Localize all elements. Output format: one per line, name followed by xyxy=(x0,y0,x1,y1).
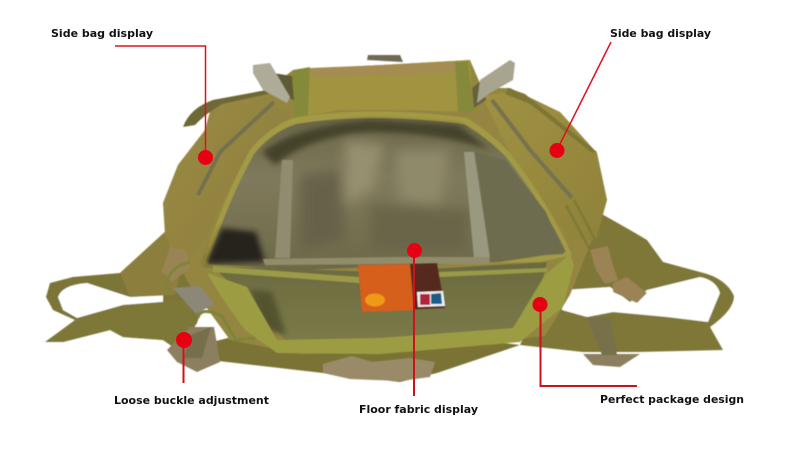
marker dot xyxy=(407,243,422,258)
left pouch shading xyxy=(163,95,293,265)
inner mesh pocket xyxy=(263,152,564,265)
callout: floor fabric display xyxy=(359,243,478,416)
main outer body and side pouches xyxy=(163,60,607,354)
right strap opening xyxy=(562,277,720,322)
label: Perfect package design xyxy=(600,393,744,406)
credit card xyxy=(358,263,445,312)
right pouch flap xyxy=(505,88,597,153)
bottom strap and centre buckle xyxy=(167,327,520,382)
product photo: tactical waist bag xyxy=(45,55,734,382)
label: Loose buckle adjustment xyxy=(114,394,269,407)
centre buckle xyxy=(323,356,435,381)
right side buckle xyxy=(472,60,515,108)
top panel xyxy=(293,55,474,118)
leader line xyxy=(115,46,206,157)
right cords xyxy=(566,200,598,250)
dark left corner xyxy=(205,228,265,264)
lining folds xyxy=(300,140,470,250)
marker dot xyxy=(532,297,548,312)
shadow under the top rim xyxy=(262,120,490,165)
callout: perfect package design xyxy=(532,297,744,406)
front pocket rim xyxy=(213,266,547,283)
right pouch shading xyxy=(482,92,607,240)
leader line xyxy=(413,250,415,396)
left side buckle xyxy=(253,63,294,103)
callout: side bag display (left) xyxy=(51,27,213,165)
strap buckle right xyxy=(583,354,640,367)
left strap buckle xyxy=(167,327,220,372)
label: Side bag display xyxy=(51,27,153,40)
callout: loose buckle adjustment xyxy=(114,332,269,407)
left drawstring toggle xyxy=(162,247,190,282)
front pocket lip xyxy=(207,254,574,354)
front pocket interior xyxy=(212,262,547,340)
callout: side bag display (right) xyxy=(550,27,711,158)
marker dot xyxy=(550,143,564,158)
leader line xyxy=(557,42,611,150)
leader line xyxy=(182,340,184,383)
interior opening rim xyxy=(203,112,572,268)
marker dot xyxy=(176,332,192,348)
interior lining xyxy=(208,118,566,270)
right zipper xyxy=(492,100,572,198)
left pouch flap xyxy=(183,90,268,127)
top buckle xyxy=(367,55,403,62)
left strap opening xyxy=(58,283,163,318)
label: Floor fabric display xyxy=(359,403,478,416)
marker dot xyxy=(198,150,213,165)
left cords xyxy=(166,262,255,340)
leader line xyxy=(540,305,637,386)
pocket shadow xyxy=(250,290,286,334)
right drawstring toggles xyxy=(590,246,618,284)
left side release buckle xyxy=(173,286,214,314)
label: Side bag display xyxy=(610,27,711,40)
left zipper xyxy=(198,102,274,195)
right strap xyxy=(520,213,734,367)
left strap xyxy=(45,230,205,350)
